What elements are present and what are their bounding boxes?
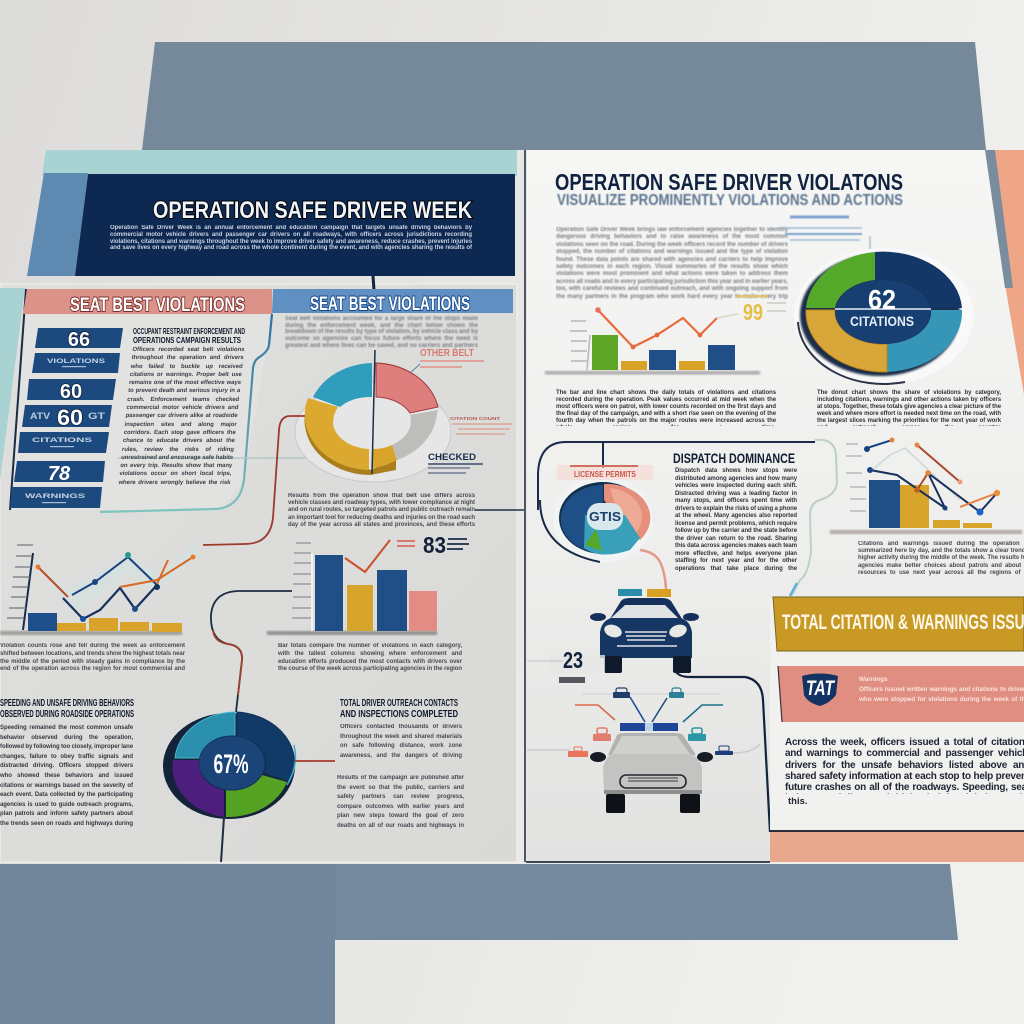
banner title: OPERATION SAFE DRIVER WEEK bbox=[153, 197, 473, 224]
donut label right: CITATION COUNT bbox=[450, 416, 500, 421]
bar chart callout 83 bbox=[397, 532, 469, 558]
small donut label bbox=[557, 465, 653, 480]
panel: blue section header bbox=[272, 289, 513, 315]
stat boxes bbox=[10, 328, 123, 508]
blue side tab bbox=[27, 173, 88, 276]
small line and bar chart bbox=[830, 438, 1022, 534]
pink banner bbox=[778, 666, 1024, 722]
bar and line chart bbox=[545, 307, 760, 374]
icon: pink mini vehicle bbox=[593, 728, 611, 741]
panel: seat belt card bbox=[10, 289, 310, 512]
right lower heading: AND INSPECTIONS COMPLETED bbox=[340, 709, 458, 720]
bar chart callout 83: 83 bbox=[423, 532, 446, 558]
donut label right bbox=[450, 416, 512, 434]
faint horizontal divider bbox=[118, 457, 310, 459]
donut chart: seat belt bbox=[295, 350, 451, 482]
gold heading bbox=[773, 597, 1024, 651]
diagram callouts around gray car bbox=[527, 688, 760, 757]
small donut chart bbox=[540, 477, 653, 563]
icon: navy mini vehicle bbox=[715, 746, 733, 755]
stat caption: CITATIONS bbox=[32, 438, 92, 444]
donut chart: 62 bbox=[794, 248, 974, 384]
connector: donut down bbox=[221, 817, 224, 862]
totals last line: this. bbox=[788, 796, 808, 807]
panel: title banner bbox=[75, 174, 515, 276]
card heading: OCCUPANT RESTRAINT ENFORCEMENT AND bbox=[133, 326, 245, 336]
stat 78: 78 bbox=[48, 463, 71, 485]
blue-gray strip bbox=[985, 150, 1013, 288]
chart callout 99: 99 bbox=[743, 299, 763, 325]
icon: mini vehicle top right bbox=[669, 688, 684, 698]
card header: SEAT BEST VIOLATIONS bbox=[70, 295, 245, 316]
card header bbox=[23, 289, 272, 316]
axis ticks bbox=[7, 545, 33, 618]
panel: blue section header: SEAT BEST VIOLATIONS bbox=[310, 294, 470, 315]
icon: orange mini vehicle bbox=[568, 747, 588, 757]
donut label bottom bbox=[428, 452, 483, 473]
icon: mini vehicle top left bbox=[613, 688, 630, 698]
bottom edge bbox=[526, 861, 770, 863]
left lower heading: SPEEDING AND UNSAFE DRIVING BEHAVIORS bbox=[0, 698, 134, 709]
left edge divider bbox=[524, 150, 526, 862]
connector: bar chart to donut bbox=[211, 591, 292, 712]
stat caption 60: 60 bbox=[57, 405, 83, 430]
left lower heading bbox=[0, 698, 134, 720]
donut chart: 62: CITATIONS bbox=[850, 313, 914, 329]
stat caption bbox=[32, 353, 120, 373]
stat 66: 66 bbox=[68, 329, 90, 351]
line chart bbox=[0, 540, 198, 635]
stat caption: VIOLATIONS bbox=[47, 359, 105, 365]
title: OPERATION SAFE DRIVER VIOLATONS bbox=[555, 169, 903, 195]
connector: stub to donut bbox=[602, 442, 604, 468]
card heading bbox=[133, 326, 245, 345]
panel: totals card bbox=[770, 597, 1024, 832]
card heading: OPERATIONS CAMPAIGN RESULTS bbox=[133, 335, 241, 345]
icon: navy police car bbox=[590, 589, 699, 673]
donut chart: 67%: 67% bbox=[214, 749, 248, 779]
subtitle: VISUALIZE PROMINENTLY VIOLATIONS AND ACTIONS bbox=[557, 192, 903, 209]
connector: pink to police car bbox=[640, 550, 666, 589]
orange band bbox=[770, 832, 1024, 862]
icon: shield: TAT bbox=[806, 677, 836, 700]
stat caption 60: ATV bbox=[30, 411, 50, 421]
connector: red segment bbox=[213, 630, 242, 695]
right lower heading bbox=[340, 698, 458, 720]
label 23: 23 bbox=[563, 647, 583, 673]
donut label bottom: CHECKED bbox=[428, 452, 477, 462]
banner text: Warnings bbox=[859, 676, 887, 683]
left sheet bbox=[0, 150, 525, 862]
panel: left sheet base bbox=[0, 284, 517, 862]
connector: donut to text bbox=[295, 760, 335, 762]
callout above donut bbox=[780, 217, 870, 252]
donut chart: 62: 62 bbox=[868, 284, 896, 315]
connector: rounded bracket bbox=[538, 442, 815, 510]
connector: donut to line chart bbox=[203, 416, 305, 545]
stat caption: WARNINGS bbox=[25, 494, 85, 500]
connector: light curve tip bbox=[790, 583, 797, 596]
stat 60: 60 bbox=[60, 381, 82, 403]
donut label top bbox=[410, 348, 484, 373]
chart callout 99 bbox=[737, 295, 786, 325]
stat 66 bbox=[35, 328, 123, 351]
stat caption bbox=[18, 432, 109, 453]
small donut heading: DISPATCH DOMINANCE bbox=[673, 450, 795, 466]
teal header strip bbox=[42, 150, 517, 176]
stat caption bbox=[10, 487, 102, 508]
right lower heading: TOTAL DRIVER OUTREACH CONTACTS bbox=[340, 698, 458, 709]
stat 78 bbox=[14, 461, 105, 485]
donut label top: OTHER BELT bbox=[420, 348, 474, 359]
icon: shield bbox=[802, 674, 838, 706]
stat caption 60: GT bbox=[88, 411, 106, 421]
connector: light curve bbox=[792, 440, 837, 595]
stat caption 60 bbox=[22, 405, 112, 430]
bar chart bbox=[267, 540, 437, 635]
connector bbox=[373, 276, 374, 290]
donut chart: 67% bbox=[163, 712, 295, 819]
stat 60 bbox=[27, 379, 116, 403]
icon: teal mini vehicle bbox=[688, 728, 706, 741]
teal edge bbox=[0, 288, 25, 480]
connector: police car to card bbox=[676, 672, 770, 832]
small donut label: LICENSE PERMITS bbox=[574, 469, 636, 479]
right sheet bbox=[525, 150, 1024, 862]
label 23 bbox=[527, 647, 605, 683]
connector: to right sheet bbox=[475, 509, 525, 511]
left lower heading: OBSERVED DURING ROADSIDE OPERATIONS bbox=[0, 709, 134, 720]
small donut chart: GTIS bbox=[589, 509, 621, 524]
icon: gray patrol car bbox=[590, 723, 713, 813]
panel: right sheet base bbox=[527, 150, 1024, 862]
banner text bbox=[859, 674, 1024, 704]
